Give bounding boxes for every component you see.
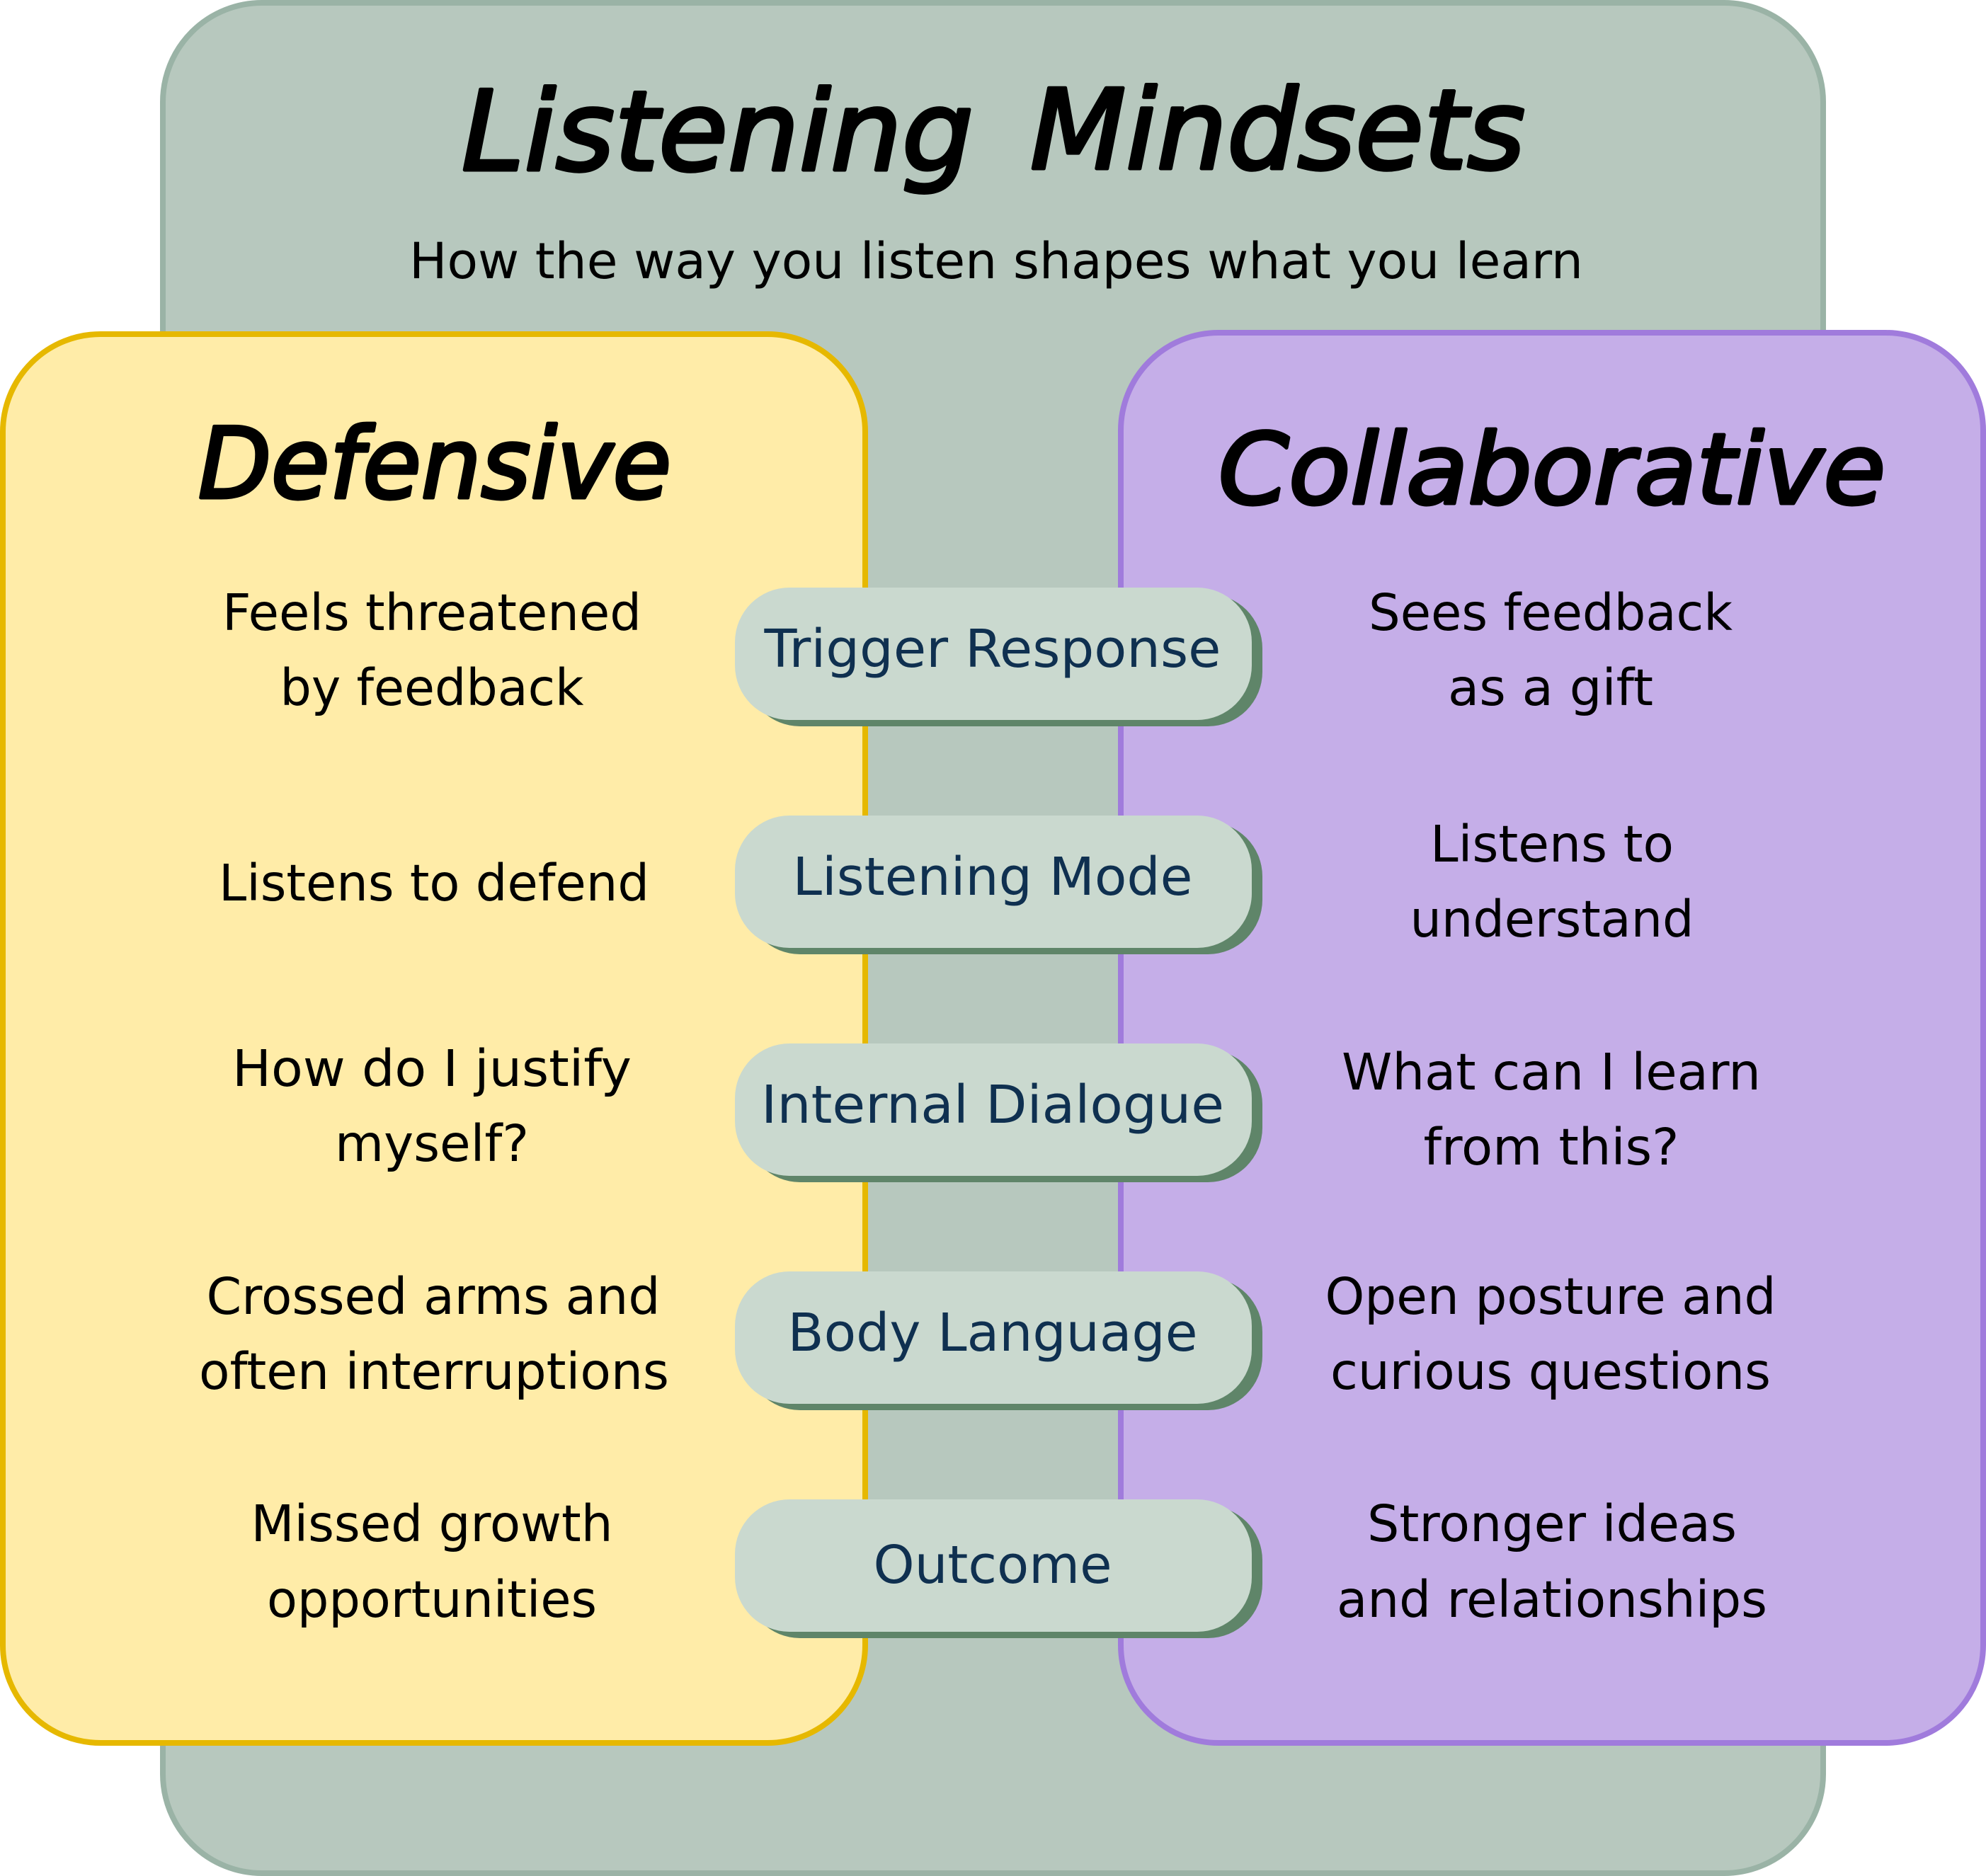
panel: collaborative	[1121, 333, 1983, 1743]
text: defensive outcome: opportunities	[267, 1570, 597, 1629]
pill: body language: Body Language	[787, 1303, 1198, 1363]
text: defensive internal dialogue	[232, 1039, 632, 1173]
text: collaborative listening mode: Listens to	[1430, 815, 1674, 874]
subtitle: How the way you listen shapes what you learn	[409, 232, 1583, 290]
pill: listening mode	[735, 816, 1262, 954]
text: collaborative listening mode: understand	[1410, 890, 1694, 949]
pill: body language	[735, 1271, 1262, 1410]
text: collaborative internal dialogue: from this?	[1423, 1118, 1679, 1177]
text: collaborative outcome: Stronger ideas	[1367, 1494, 1737, 1553]
pill: internal dialogue: Internal Dialogue	[761, 1075, 1224, 1136]
pill: trigger response	[735, 588, 1262, 726]
title: Mindsets	[1030, 66, 1525, 195]
panel: defensive	[3, 334, 865, 1743]
text: defensive body language: Crossed arms and	[207, 1267, 660, 1326]
title	[462, 66, 1525, 196]
text: defensive body language: often interruptions	[199, 1342, 669, 1401]
text: collaborative outcome: and relationships	[1337, 1570, 1767, 1629]
heading: defensive: Defensive	[198, 407, 671, 521]
text: collaborative body language	[1325, 1267, 1776, 1401]
pill: internal dialogue	[735, 1043, 1262, 1182]
text: defensive internal dialogue: How do I justify	[232, 1039, 632, 1098]
text: collaborative internal dialogue	[1342, 1043, 1761, 1177]
text: collaborative body language: curious questions	[1330, 1342, 1771, 1401]
text: defensive body language	[199, 1267, 669, 1401]
text: defensive trigger response: Feels threatened	[222, 583, 641, 642]
pill: listening mode: Listening Mode	[793, 847, 1192, 908]
text: collaborative trigger response	[1369, 583, 1733, 717]
text: collaborative body language: Open posture and	[1325, 1267, 1776, 1326]
text: defensive internal dialogue: myself?	[335, 1114, 529, 1173]
text: collaborative outcome	[1337, 1494, 1767, 1629]
pill: outcome: Outcome	[874, 1535, 1112, 1596]
text: defensive trigger response	[222, 583, 641, 717]
title: Listening	[462, 67, 974, 196]
text: collaborative trigger response: Sees feedback	[1369, 583, 1733, 642]
heading: collaborative: Collaborative	[1219, 413, 1885, 527]
text: defensive listening mode: Listens to defend	[219, 854, 649, 913]
text: collaborative listening mode	[1410, 815, 1694, 949]
pill: outcome	[735, 1499, 1262, 1638]
text: defensive outcome	[251, 1494, 613, 1629]
text: defensive outcome: Missed growth	[251, 1494, 613, 1553]
text: collaborative trigger response: as a gift	[1448, 658, 1653, 717]
text: collaborative internal dialogue: What can I learn	[1342, 1043, 1761, 1102]
text: defensive trigger response: by feedback	[280, 658, 583, 717]
pill: trigger response: Trigger Response	[763, 619, 1221, 680]
